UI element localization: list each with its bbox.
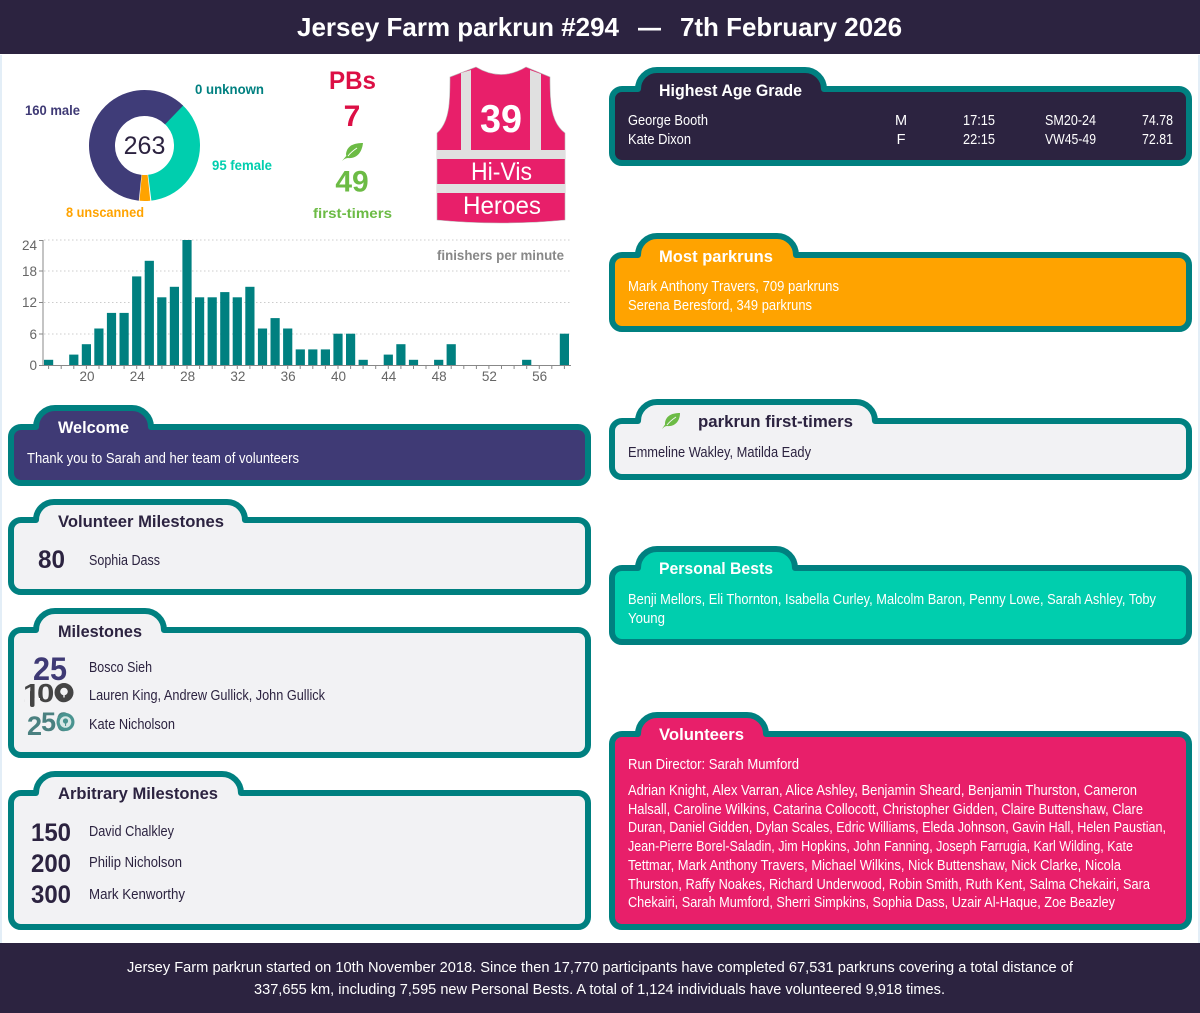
bar chart: finishers per minute: 48 — [432, 369, 447, 384]
panel: Arbitrary Milestones: Arbitrary Milestones — [58, 784, 218, 803]
panel: Arbitrary Milestones: David Chalkley — [89, 824, 175, 840]
panel: Volunteers: Halsall, Caroline Wilkins, Catarina Collocott, Christopher Gidden, Claire Buttenshaw, Clare — [628, 802, 1143, 818]
panel: Arbitrary Milestones: Philip Nicholson — [89, 855, 182, 871]
footer summary: Jersey Farm parkrun started on 10th November 2018. Since then 17,770 participants have completed 67,531 parkruns covering a total distance of — [127, 960, 1074, 976]
panel: Volunteer Milestones — [11, 502, 588, 592]
panel: Highest Age Grade: 74.78 — [1142, 113, 1173, 129]
hi-vis vest: 39 volunteers: 39 — [480, 98, 522, 141]
footer summary — [0, 943, 1200, 1013]
PBs and first-timers counts: 7 — [344, 100, 360, 133]
panel: Highest Age Grade: 17:15 — [963, 113, 995, 129]
bar chart: finishers per minute — [22, 238, 571, 384]
PBs and first-timers counts: PBs — [329, 67, 376, 95]
panel: Volunteers: Adrian Knight, Alex Varran, Alice Ashley, Benjamin Sheard, Benjamin Thurston, Cameron — [628, 783, 1137, 799]
bar chart: finishers per minute: 44 — [381, 369, 397, 384]
panel: Volunteers: Tettmar, Mark Anthony Travers, Michael Wilkins, Nick Buttenshaw, Nick Clarke, Nicola — [628, 858, 1122, 874]
panel: Highest Age Grade — [612, 70, 1189, 163]
bar chart: finishers per minute: 6 — [29, 327, 37, 342]
panel: Arbitrary Milestones: Mark Kenworthy — [89, 887, 186, 903]
panel: Arbitrary Milestones: 300 — [31, 881, 71, 909]
hi-vis vest: 39 volunteers: Heroes — [463, 192, 541, 220]
panel: Most parkruns — [612, 236, 1189, 329]
panel: Welcome — [11, 408, 588, 483]
panel: Welcome: Thank you to Sarah and her team of volunteers — [27, 451, 299, 467]
donut chart: finishers by gender — [25, 82, 272, 220]
panel: Volunteers — [612, 715, 1189, 927]
bar chart: finishers per minute: 12 — [22, 295, 37, 310]
hi-vis vest: 39 volunteers — [437, 67, 565, 223]
donut chart: finishers by gender: 160 male — [25, 103, 80, 118]
bar chart: finishers per minute: 40 — [331, 369, 346, 384]
panel: Volunteers: Jean-Pierre Borel-Saladin, Jim Hopkins, John Fanning, Joseph Farrugia, Karl Wilding, Kate — [628, 839, 1133, 855]
donut chart: finishers by gender: 95 female — [212, 158, 272, 173]
panel: Milestones: Milestones — [58, 622, 142, 641]
panel: Volunteer Milestones: Sophia Dass — [89, 553, 160, 569]
panel: Highest Age Grade: Kate Dixon — [628, 132, 691, 148]
panel: Personal Bests: Personal Bests — [659, 559, 773, 578]
donut chart: finishers by gender: 8 unscanned — [66, 205, 144, 220]
icon: 100 milestone: 100 — [23, 679, 72, 708]
panel: Highest Age Grade: F — [897, 132, 906, 148]
bar chart: finishers per minute: 28 — [180, 369, 195, 384]
title banner: — — [638, 12, 661, 42]
panel: Highest Age Grade: 72.81 — [1142, 132, 1173, 148]
bar chart: finishers per minute: 24 — [22, 238, 37, 253]
panel: Highest Age Grade: M — [895, 113, 907, 129]
panel: Volunteers: Run Director: Sarah Mumford — [628, 757, 799, 773]
panel: Highest Age Grade: SM20-24 — [1045, 113, 1096, 129]
panel: Highest Age Grade: Highest Age Grade — [659, 81, 802, 100]
title banner — [0, 0, 1200, 54]
icon: 250 milestone: 250 — [27, 707, 71, 741]
bar chart: finishers per minute: 36 — [281, 369, 296, 384]
title banner: 7th February 2026 — [680, 12, 902, 42]
panel: Most parkruns: Most parkruns — [659, 247, 773, 266]
panel: Highest Age Grade: VW45-49 — [1045, 132, 1096, 148]
bar chart: finishers per minute: 0 — [29, 358, 37, 373]
bar chart: finishers per minute: 56 — [532, 369, 547, 384]
title banner: Jersey Farm parkrun #294 — [297, 12, 620, 42]
bar chart: finishers per minute: 52 — [482, 369, 497, 384]
panel: Most parkruns: Serena Beresford, 349 parkruns — [628, 298, 812, 314]
panel: Milestones: Kate Nicholson — [89, 717, 175, 733]
icon: 25 milestone: 25 — [33, 651, 67, 687]
panel: Arbitrary Milestones: 200 — [31, 850, 71, 878]
donut chart: finishers by gender: 0 unknown — [195, 82, 264, 97]
panel: Milestones: Lauren King, Andrew Gullick, John Gullick — [89, 688, 326, 704]
bar chart: finishers per minute: 18 — [22, 264, 37, 279]
panel: parkrun first-timers — [612, 402, 1189, 477]
hi-vis vest: 39 volunteers: Hi-Vis — [471, 158, 532, 186]
panel: parkrun first-timers: Emmeline Wakley, Matilda Eady — [628, 445, 812, 461]
panel: Highest Age Grade: George Booth — [628, 113, 708, 129]
panel: Welcome: Welcome — [58, 418, 129, 437]
panel: Volunteer Milestones: 80 — [38, 546, 65, 574]
panel: Arbitrary Milestones: 150 — [31, 819, 71, 847]
panel: Arbitrary Milestones — [11, 774, 588, 927]
icon: leaf — [342, 143, 363, 161]
panel: Volunteers: Volunteers — [659, 725, 744, 744]
panel: Personal Bests: Young — [628, 611, 665, 627]
bar chart: finishers per minute: 32 — [230, 369, 245, 384]
panel: Milestones: Bosco Sieh — [89, 660, 152, 676]
bar chart: finishers per minute: 20 — [79, 369, 95, 384]
panel: Most parkruns: Mark Anthony Travers, 709 parkruns — [628, 279, 839, 295]
donut chart: finishers by gender: 263 — [124, 132, 165, 160]
footer summary: 337,655 km, including 7,595 new Personal Bests. A total of 1,124 individuals have volunteered 9,918 times. — [254, 982, 945, 998]
bar chart: finishers per minute: 24 — [130, 369, 145, 384]
icon: leaf — [662, 413, 680, 429]
PBs and first-timers counts: 49 — [335, 166, 369, 198]
PBs and first-timers counts — [313, 67, 392, 221]
bar chart: finishers per minute: finishers per minute — [437, 248, 564, 263]
panel: Volunteers: Chekairi, Sarah Mumford, Sherri Simpkins, Sophia Dass, Uzair Al-Haque, Zoe Beazley — [628, 895, 1116, 911]
panel: Milestones — [11, 611, 588, 755]
panel: parkrun first-timers: parkrun first-timers — [698, 412, 853, 431]
panel: Personal Bests — [612, 549, 1189, 642]
panel: Volunteer Milestones: Volunteer Milestones — [58, 512, 224, 531]
PBs and first-timers counts: first-timers — [313, 206, 392, 221]
panel: Highest Age Grade: 22:15 — [963, 132, 995, 148]
